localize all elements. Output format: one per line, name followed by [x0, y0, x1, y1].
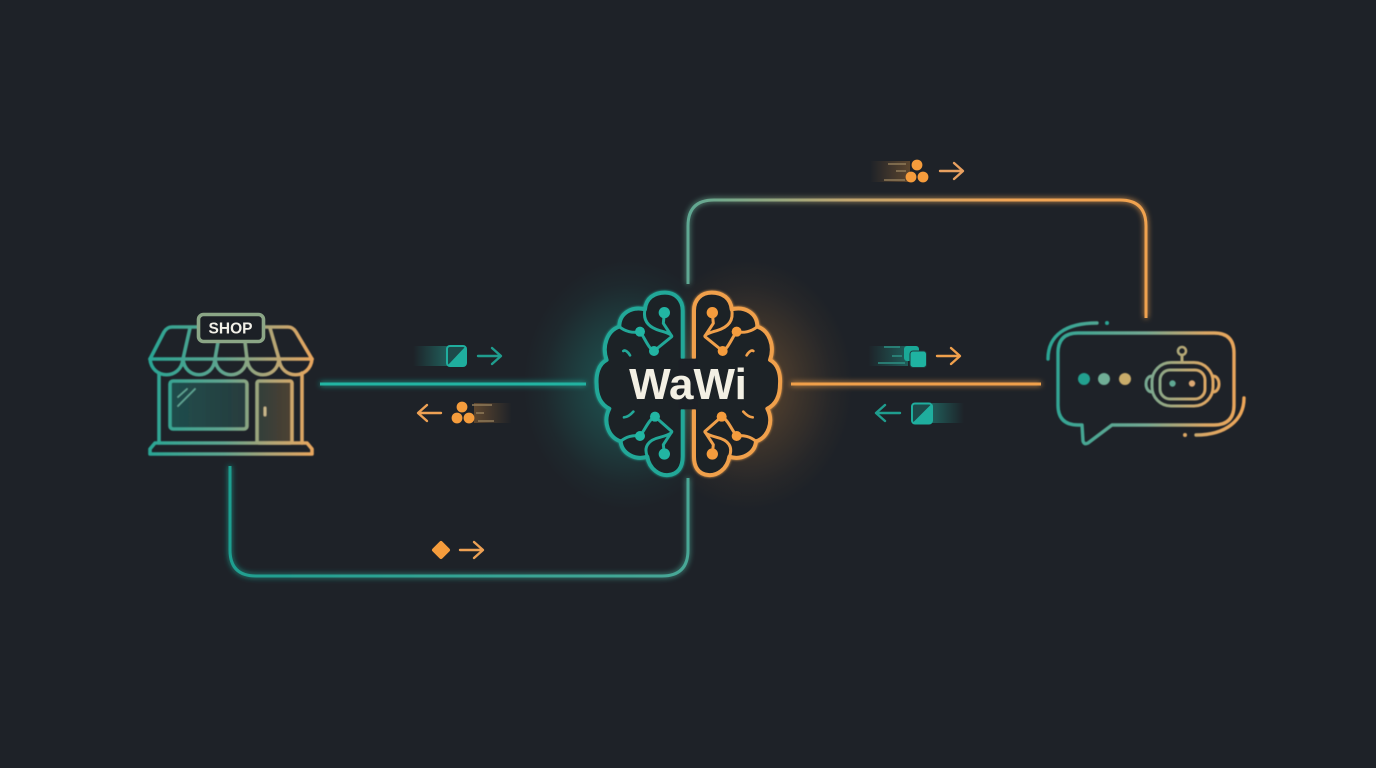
brain label: WaWi	[629, 360, 747, 409]
icon: chatbot speech bubble	[1048, 321, 1244, 444]
shop sign: SHOP	[209, 320, 252, 338]
data packet: dots moving left, lower left	[418, 402, 512, 423]
connector: WaWi over the top to chatbot	[688, 200, 1146, 318]
data packet: square moving right, upper left	[413, 346, 501, 366]
connector: shop to WaWi	[320, 382, 586, 386]
brain halo	[523, 260, 853, 510]
data packet: diamond moving right, bottom route	[434, 542, 483, 558]
brain left half	[597, 293, 683, 475]
data packet: dots moving right, top route	[870, 160, 963, 182]
data packet: square moving left, lower right	[876, 403, 964, 424]
icon: shop	[150, 327, 312, 454]
brain right half	[694, 293, 780, 475]
shop sign	[198, 314, 264, 342]
data packet: documents moving right, upper right	[868, 346, 960, 368]
icon: WaWi brain	[597, 293, 780, 475]
connector: shop underneath to WaWi	[230, 466, 688, 576]
connector: WaWi to chatbot	[791, 382, 1041, 386]
